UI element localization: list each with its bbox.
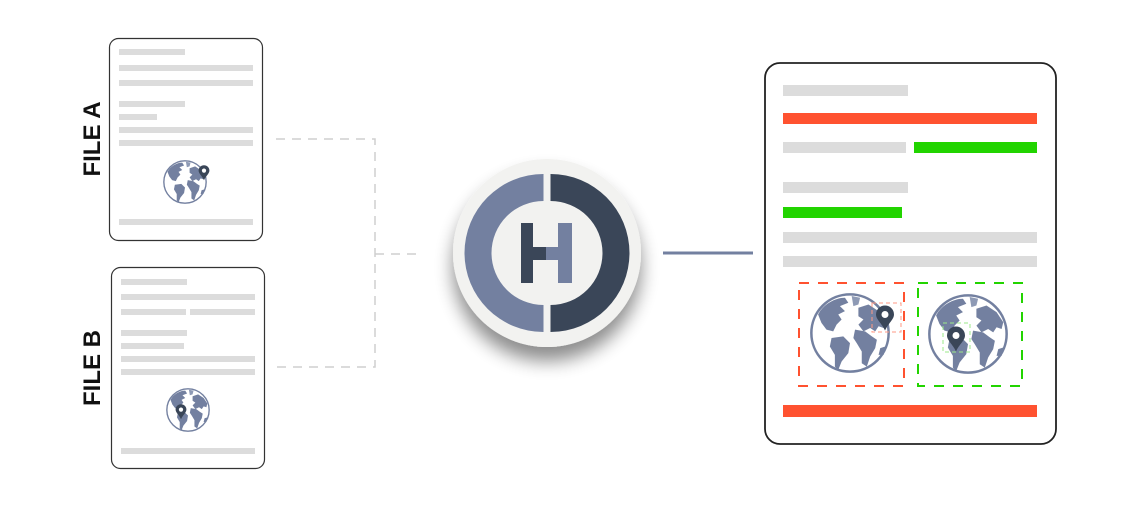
panel: file B document [112, 268, 264, 468]
arrow: dashed connector from files to logo [276, 139, 418, 367]
icon: H logo [453, 159, 641, 347]
callout: green dashed globe box [918, 283, 1022, 386]
label: FILE B: FILE B [79, 330, 106, 406]
icon: globe with pin (file B) [167, 389, 209, 431]
panel: file A document [110, 38, 262, 240]
label: FILE A: FILE A [79, 101, 106, 177]
callout: red dashed globe box [799, 283, 904, 386]
arrow: connector to result [663, 252, 753, 254]
icon: globe with pin (file A) [164, 161, 209, 203]
panel: merged result document [765, 63, 1056, 444]
